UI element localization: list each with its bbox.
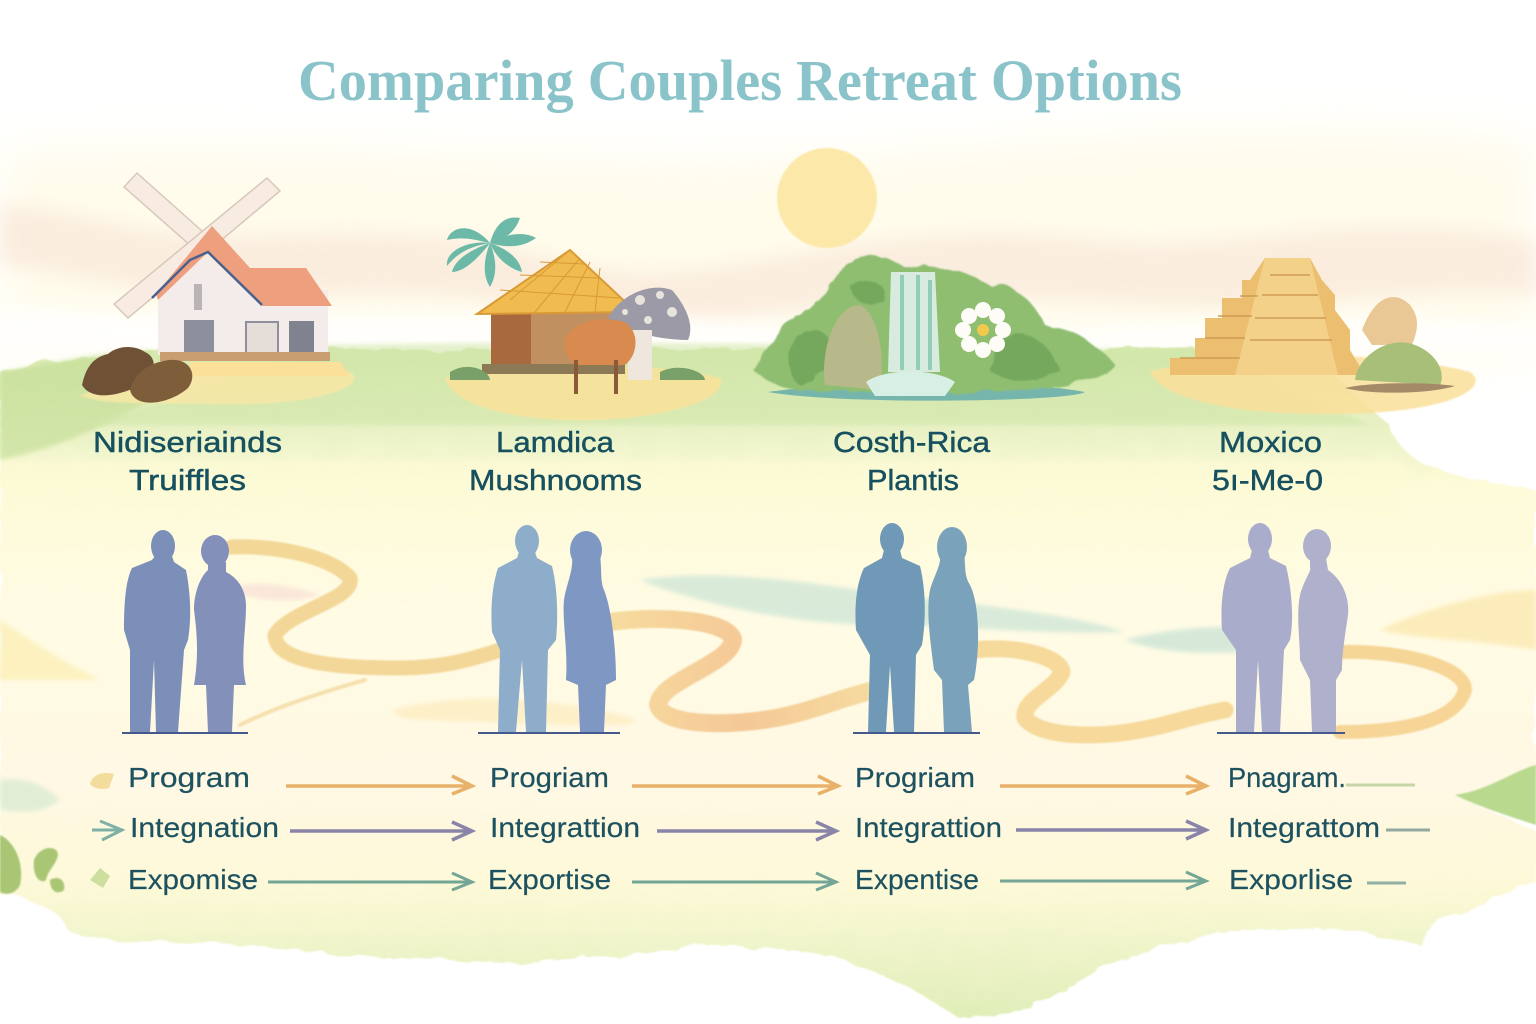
integration label 1: Integnation (130, 812, 279, 843)
heading: option 1: Nidiseriainds (93, 427, 282, 459)
icon: program leaf (90, 773, 114, 789)
heading: option 3 (833, 427, 991, 497)
row labels: option 1: Program (128, 762, 250, 793)
decorative shrub, lower left (0, 835, 64, 894)
icon: expertise leaf (90, 868, 110, 888)
heading: option 4 (1212, 427, 1323, 497)
couple 3 silhouettes (853, 523, 980, 733)
couple 1 silhouettes (122, 530, 248, 733)
expertise label 1: Expomise (128, 864, 258, 895)
couple 4 silhouettes (1217, 523, 1348, 733)
heading: option 4: 5ı-Me-0 (1212, 465, 1323, 497)
title: Comparing Couples Retreat Options (298, 48, 1182, 113)
heading: option 3: Plantis (867, 465, 959, 497)
integration label 2: Integrattion (490, 812, 640, 843)
background: watercolor landscape (0, 343, 1536, 1020)
icon: windmill, farmhouse and truffles (80, 173, 354, 404)
heading: option 3: Costh-Rica (833, 427, 991, 459)
winding journey path (232, 547, 1465, 735)
icon: palm, hut, animal and mushroom (445, 217, 721, 420)
integration label 3: Integrattion (855, 812, 1002, 843)
heading: option 1 (93, 427, 282, 497)
row labels: option 4: Pnagram. (1228, 762, 1346, 793)
integration label 4: Integrattom (1228, 812, 1380, 843)
expertise label 4: Exporlise (1229, 864, 1353, 895)
heading: option 4: Moxico (1219, 427, 1322, 459)
expertise label 3: Expentise (855, 864, 979, 895)
arrows: integration row (290, 821, 1430, 840)
icon: sun (777, 148, 877, 248)
row labels: option 2: Progriam (490, 762, 609, 793)
couple 2 silhouettes (478, 525, 620, 733)
arrows: expertise row (268, 872, 1406, 890)
heading: option 1: Truiffles (129, 465, 246, 497)
heading: option 2: Lamdica (496, 427, 615, 459)
icon: jungle, waterfall and flower (755, 257, 1115, 401)
heading: option 2 (469, 427, 642, 497)
arrows: program row (286, 776, 1415, 794)
row labels: option 3: Progriam (855, 762, 975, 793)
icon: pyramid and hills (1150, 258, 1476, 414)
icon: integration arrow (92, 821, 122, 840)
expertise label 2: Exportise (488, 864, 611, 895)
heading: option 2: Mushnooms (469, 465, 642, 497)
